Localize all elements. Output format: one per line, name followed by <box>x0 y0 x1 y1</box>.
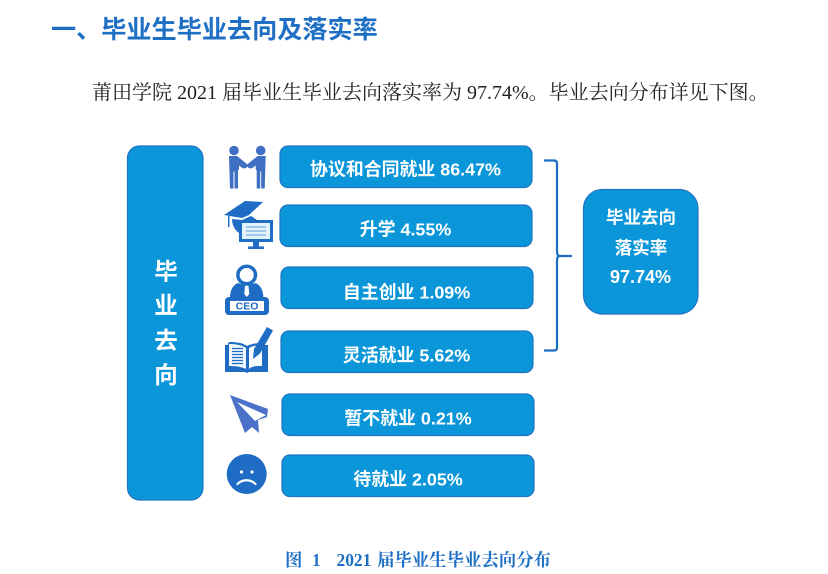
icon: CEO: CEO <box>236 301 258 313</box>
intro text: 莆田学院 2021 届毕业生毕业去向落实率为 97.74%。毕业去向分布详见下图。 <box>92 81 769 104</box>
panel: 毕业去向落实率: 毕业去向 <box>606 208 676 228</box>
bar: 升学 <box>280 205 532 246</box>
panel: left label 毕业去向: 毕 <box>154 258 178 284</box>
panel: left label 毕业去向: 向 <box>154 362 178 388</box>
panel: left label 毕业去向: 去 <box>154 328 178 354</box>
icon: open book and pen <box>225 327 273 373</box>
panel: 毕业去向落实率: 97.74% <box>610 267 671 287</box>
title: 一、毕业生毕业去向及落实率 <box>51 16 378 44</box>
bar: 自主创业 <box>281 267 533 308</box>
bar: 暂不就业 <box>282 394 534 436</box>
icon: paper plane <box>230 395 268 433</box>
icon: sad face <box>227 454 267 494</box>
figure caption: 1 <box>312 550 321 570</box>
bar: 自主创业: 自主创业 1.09% <box>343 282 470 302</box>
panel: 毕业去向落实率: 落实率 <box>615 238 667 258</box>
bar: 暂不就业: 暂不就业 0.21% <box>344 408 472 428</box>
bar: 待就业: 待就业 2.05% <box>353 470 463 490</box>
figure caption: 届毕业生毕业去向分布 <box>377 550 551 570</box>
icon: handshake <box>229 146 266 188</box>
bar: 灵活就业 <box>281 331 533 372</box>
bar: 协议和合同就业 <box>280 146 532 188</box>
bar: 协议和合同就业: 协议和合同就业 86.47% <box>310 158 501 180</box>
figure caption: 2021 <box>336 550 371 570</box>
icon: CEO <box>225 266 269 315</box>
figure caption: 图 <box>285 550 302 570</box>
bar: 灵活就业: 灵活就业 5.62% <box>343 346 470 366</box>
bar: 待就业 <box>282 455 534 496</box>
bracket <box>544 160 572 350</box>
panel: left label 毕业去向: 业 <box>154 292 178 318</box>
panel: 毕业去向落实率 <box>584 190 698 314</box>
icon: graduate with monitor <box>224 201 273 249</box>
panel: left label 毕业去向 <box>128 146 203 500</box>
bar: 升学: 升学 4.55% <box>360 218 451 240</box>
